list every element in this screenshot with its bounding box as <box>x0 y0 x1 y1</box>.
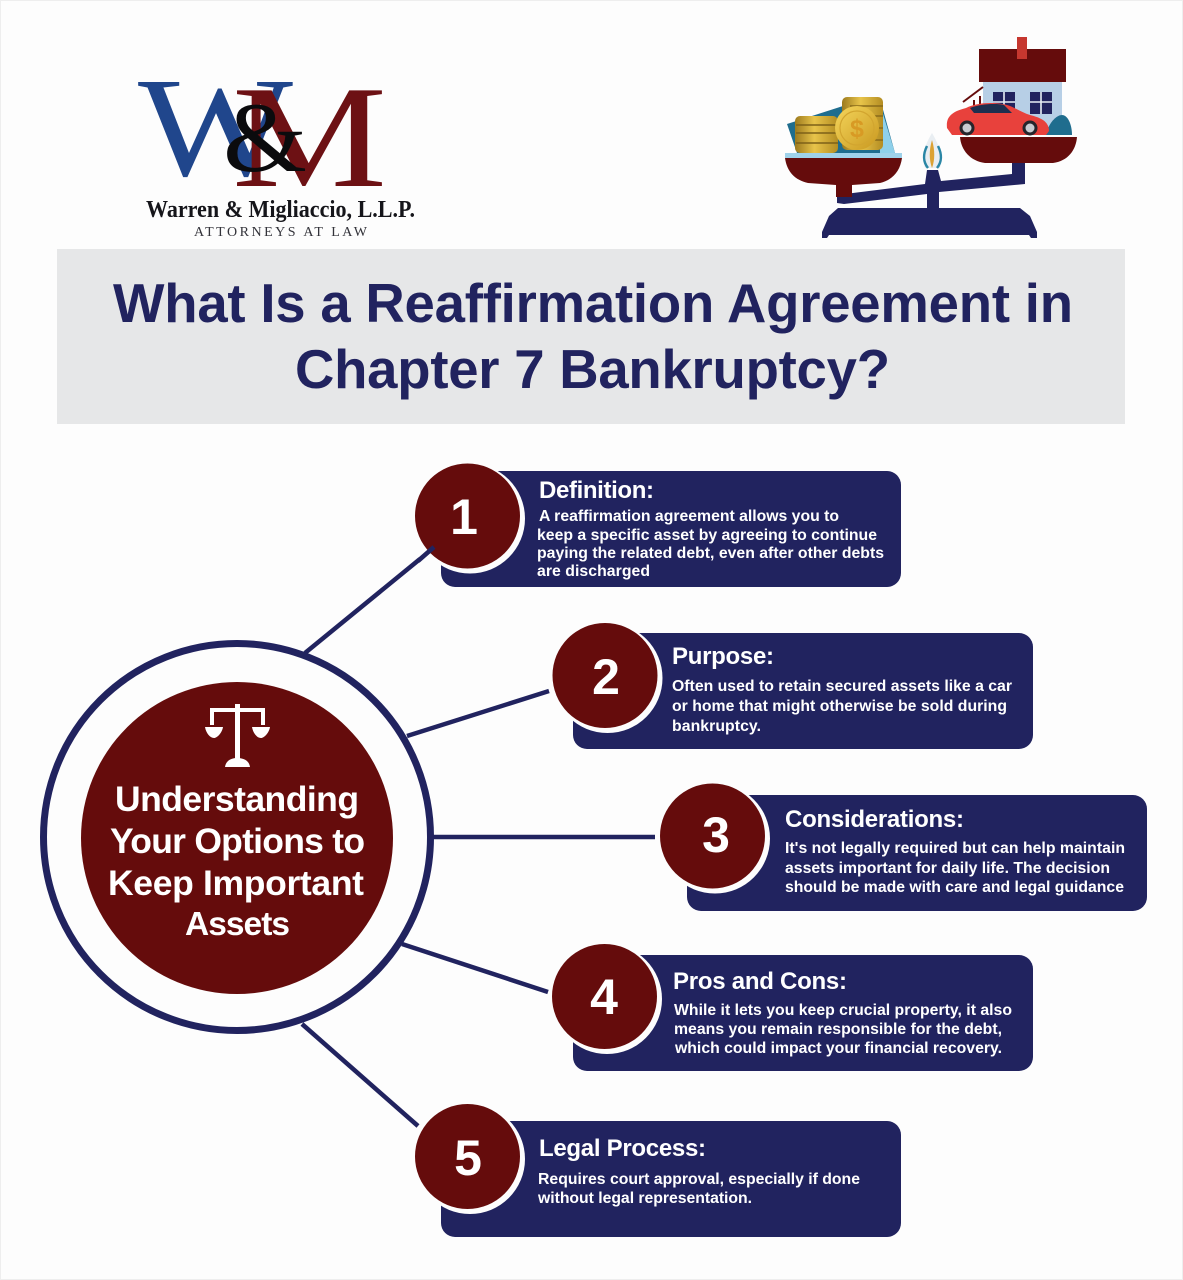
panel 1: Definition <box>415 464 901 587</box>
bush <box>1046 115 1072 135</box>
hub text: Assets <box>185 906 290 943</box>
body text: or home that might otherwise be sold during <box>672 698 1007 715</box>
panel 4: Pros and Cons <box>552 944 1033 1071</box>
right pan <box>960 137 1077 163</box>
body text: keep a specific asset by agreeing to continue <box>537 527 877 544</box>
hub text: Your Options to <box>110 821 365 861</box>
heading: Pros and Cons: <box>673 968 847 995</box>
body text: means you remain responsible for the debt, <box>674 1021 1002 1038</box>
body text <box>537 508 884 580</box>
heading: Considerations: <box>785 806 964 833</box>
hub text: Understanding <box>115 779 359 819</box>
heading: Legal Process: <box>539 1135 706 1162</box>
logo ampersand: & <box>223 82 307 193</box>
body text: Requires court approval, especially if done <box>538 1171 860 1188</box>
firm name: Warren & Migliaccio, L.L.P. <box>146 197 415 223</box>
number badge 5 <box>415 1104 520 1209</box>
body text: should be made with care and legal guidance <box>785 879 1124 896</box>
body text <box>537 1171 860 1207</box>
body text: A reaffirmation agreement allows you to <box>539 508 839 525</box>
scale base <box>822 208 1037 238</box>
left pan contents: card and coins <box>787 97 895 153</box>
left pan contents: card and coins: $ <box>850 115 864 143</box>
heading: Purpose: <box>672 643 774 670</box>
icon: balance scale with coins, house and car <box>785 37 1077 238</box>
body text: While it lets you keep crucial property, it also <box>674 1002 1012 1019</box>
title line 1: What Is a Reaffirmation Agreement in <box>113 273 1073 334</box>
title banner <box>57 249 1125 424</box>
panel 3: Considerations <box>660 784 1147 911</box>
firm tagline: ATTORNEYS AT LAW <box>194 225 368 240</box>
body text <box>674 1002 1012 1057</box>
number badge 4: 4 <box>590 969 618 1025</box>
logo letter M: M <box>232 56 387 218</box>
body text: Often used to retain secured assets like a car <box>672 678 1012 695</box>
body text: without legal representation. <box>537 1190 752 1207</box>
body text: bankruptcy. <box>672 718 761 735</box>
number badge 4 <box>552 944 657 1049</box>
body text: which could impact your financial recovery. <box>674 1040 1002 1057</box>
scale beam and hub <box>837 160 1025 209</box>
car <box>947 103 1049 136</box>
connector lines <box>302 559 655 1126</box>
house <box>963 37 1066 127</box>
number badge 2 <box>552 623 658 728</box>
body text <box>672 678 1012 735</box>
number badge 3: 3 <box>702 807 730 863</box>
title line 2: Chapter 7 Bankruptcy? <box>295 339 890 400</box>
number badge 1 <box>415 464 520 568</box>
hub text: Keep Important <box>108 863 364 903</box>
left pan <box>785 153 902 197</box>
number badge 3 <box>660 784 765 888</box>
logo: Warren & Migliaccio <box>138 48 415 240</box>
panel 2: Purpose <box>552 623 1033 749</box>
icon: scales of justice <box>205 704 270 767</box>
heading: Definition: <box>539 477 654 504</box>
body text: It's not legally required but can help maintain <box>785 840 1125 857</box>
hub text <box>108 779 365 943</box>
logo letter W: W <box>138 48 293 206</box>
body text: assets important for daily life. The decision <box>785 860 1110 877</box>
number badge 5: 5 <box>454 1130 482 1186</box>
body text: are discharged <box>537 563 650 580</box>
number badge 2: 2 <box>592 649 620 705</box>
panel 5: Legal Process <box>415 1104 901 1237</box>
number badge 1: 1 <box>450 489 478 545</box>
body text <box>785 840 1125 896</box>
body text: paying the related debt, even after other debts <box>537 545 884 562</box>
central hub circle <box>44 644 430 1030</box>
scale flame finial <box>923 133 941 168</box>
